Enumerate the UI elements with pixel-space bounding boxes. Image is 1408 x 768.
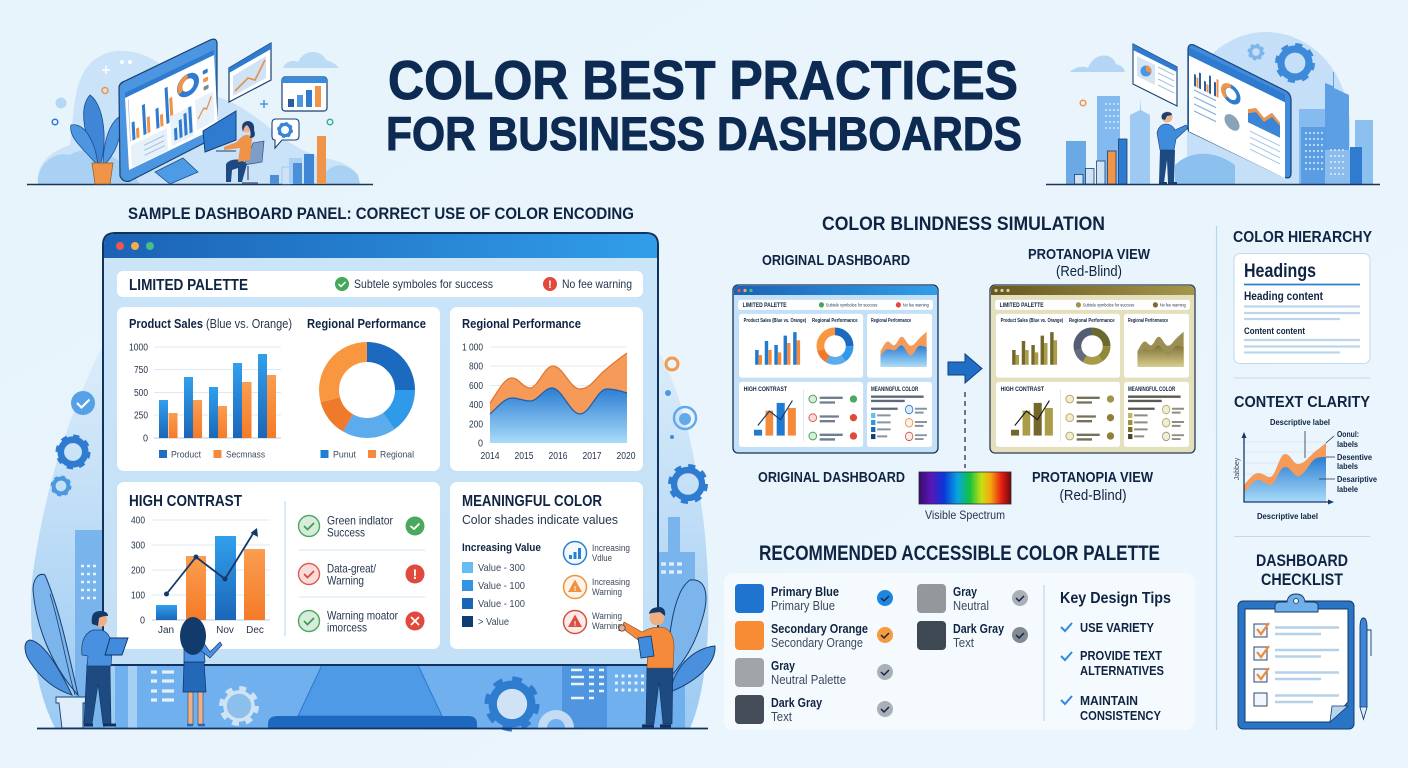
combo chart: Nov bbox=[216, 625, 234, 636]
icon: tablet display bbox=[203, 111, 236, 152]
icon: increasing value: Increasing bbox=[592, 543, 630, 553]
icon: warning: Warning bbox=[592, 611, 622, 621]
status: monitor: Warning moator bbox=[327, 608, 398, 622]
icon: increasing warning: ! bbox=[574, 586, 576, 593]
mini dashboard: protanopia: MEANINGFUL COLOR bbox=[1128, 387, 1176, 393]
card: product sales and regional performance: Product Sales bbox=[129, 317, 203, 331]
icon: check badge left bbox=[71, 391, 95, 415]
icon: gear pale bbox=[222, 689, 256, 723]
card: regional performance area chart: 0 bbox=[478, 438, 483, 450]
donut chart: regional performance bbox=[320, 352, 414, 460]
swatch: dark gray: Text bbox=[771, 710, 792, 724]
panel: sample dashboard bbox=[103, 233, 658, 665]
status: green indicator: Green indlator bbox=[327, 514, 393, 528]
card: regional performance area chart: 200 bbox=[469, 420, 483, 430]
icon: woman pointing bbox=[180, 617, 222, 725]
card: regional performance area chart: 2014 bbox=[480, 451, 500, 462]
banner: limited palette: No fee warning bbox=[562, 277, 632, 291]
bar chart: product sales: 1000 bbox=[129, 342, 148, 354]
dashed connector bbox=[964, 392, 966, 468]
swatch: gray neutral bbox=[917, 584, 1028, 613]
card: high contrast bbox=[117, 482, 440, 649]
swatch: gray: Gray bbox=[771, 659, 795, 673]
mini dashboard: original: Regional Performance bbox=[871, 318, 911, 324]
donut chart: regional performance: Regional bbox=[380, 450, 414, 460]
combo chart: 400 bbox=[131, 516, 145, 526]
icon: warning: ! bbox=[574, 621, 576, 628]
title: FOR BUSINESS DASHBOARDS bbox=[386, 107, 1022, 160]
banner: limited palette bbox=[117, 271, 643, 297]
label: original dashboard top: ORIGINAL DASHBOARD bbox=[762, 252, 910, 269]
card: color hierarchy: Headings bbox=[1244, 261, 1316, 282]
combo chart: Dec bbox=[246, 625, 264, 636]
label: protanopia view top bbox=[1028, 246, 1151, 280]
card: regional performance area chart: Regional Performance bbox=[462, 317, 581, 331]
card: product sales and regional performance bbox=[117, 307, 440, 471]
banner: limited palette: Subtele symboles for success bbox=[354, 277, 493, 291]
chart: context clarity: Desentive bbox=[1337, 453, 1373, 462]
mini dashboard: original: Regional Performance bbox=[812, 318, 858, 324]
mini dashboard: original: LIMITED PALETTE bbox=[743, 303, 787, 309]
status: warning: ! bbox=[413, 566, 417, 582]
swatch: secondary orange: Secondary Orange bbox=[771, 636, 863, 650]
mini dashboard: original: Product Sales (Blue vs. Orange) bbox=[744, 318, 806, 324]
mini dashboard: protanopia: Subtele symboles for success bbox=[1083, 302, 1135, 307]
chart: context clarity: labele bbox=[1337, 485, 1359, 494]
icon: clipboard checklist bbox=[1238, 594, 1354, 729]
swatch: gray: Neutral Palette bbox=[771, 673, 846, 687]
icon: floating bar chart window bbox=[282, 77, 327, 111]
chart: context clarity bbox=[1234, 417, 1378, 521]
card: regional performance area chart: 2016 bbox=[548, 451, 568, 462]
panel: accessible color palette bbox=[724, 573, 1195, 730]
illustration: scene behind dashboard bbox=[31, 345, 708, 728]
card: regional performance area chart: 600 bbox=[469, 381, 483, 392]
mini dashboard: original: HIGH CONTRAST bbox=[744, 386, 787, 393]
status: green indicator: Success bbox=[327, 526, 365, 540]
key design tips: Key Design Tips bbox=[1060, 590, 1171, 607]
title: COLOR BEST PRACTICES bbox=[388, 49, 1018, 111]
heading: dashboard checklist: CHECKLIST bbox=[1261, 571, 1343, 589]
label: original dashboard bottom: ORIGINAL DASHBOARD bbox=[758, 469, 905, 486]
legend: value shades: Value - 100 bbox=[478, 598, 525, 610]
icon: seated analyst bbox=[216, 121, 264, 183]
card: color hierarchy: Content content bbox=[1244, 326, 1306, 337]
status: monitor bbox=[298, 608, 424, 634]
spectrum bar: Visible Spectrum bbox=[925, 508, 1005, 522]
bar chart: product sales: 250 bbox=[134, 410, 148, 422]
mini dashboard: original: No fee warning bbox=[903, 302, 929, 307]
chart: context clarity: labels bbox=[1337, 462, 1359, 471]
status: monitor: imorcess bbox=[327, 620, 367, 634]
card: meaningful color bbox=[450, 482, 643, 649]
heading: color hierarchy: COLOR HIERARCHY bbox=[1233, 229, 1373, 246]
banner: limited palette: ! bbox=[548, 279, 552, 291]
heading: recommended palette: RECOMMENDED ACCESSIBLE COLOR PALETTE bbox=[759, 542, 1160, 565]
label: protanopia view bottom: PROTANOPIA VIEW bbox=[1032, 469, 1154, 486]
label: protanopia view bottom: (Red-Blind) bbox=[1060, 487, 1127, 504]
swatch: primary blue bbox=[735, 584, 893, 613]
mini dashboard: original bbox=[733, 285, 938, 453]
icon: settings speech bubble bbox=[272, 119, 299, 148]
icon: gear left lower bbox=[52, 477, 70, 495]
swatch: primary blue: Primary Blue bbox=[771, 585, 839, 599]
status: warning: Warning bbox=[327, 574, 364, 588]
chart: context clarity: Descriptive label bbox=[1270, 417, 1330, 427]
swatch: gray neutral: Neutral bbox=[953, 599, 989, 613]
icon: gear dark bbox=[489, 681, 535, 727]
label: protanopia view top: PROTANOPIA VIEW bbox=[1028, 246, 1151, 263]
status: warning: Data-great/ bbox=[327, 562, 377, 576]
combo chart: 100 bbox=[131, 590, 145, 602]
icon: man in orange bbox=[619, 607, 674, 726]
bar chart: product sales: 500 bbox=[134, 388, 148, 399]
icon: pen bbox=[1360, 618, 1371, 719]
icon: floating report window bbox=[1133, 44, 1177, 106]
icon: gear half bbox=[538, 710, 574, 728]
icon: increasing value bbox=[564, 542, 630, 564]
combo chart: Jan bbox=[158, 625, 174, 636]
arrow: original to protanopia bbox=[948, 354, 982, 383]
label: protanopia view bottom bbox=[1032, 469, 1154, 504]
icon: increasing warning: Increasing bbox=[592, 577, 630, 587]
heading: sample dashboard panel: SAMPLE DASHBOARD PANEL: CORRECT USE OF COLOR ENCODING bbox=[128, 204, 634, 223]
mini dashboard: original: Subtele symboles for success bbox=[826, 302, 878, 307]
legend: value shades bbox=[462, 562, 525, 628]
heading: dashboard checklist bbox=[1256, 552, 1348, 589]
icon: city skyline bbox=[1066, 72, 1373, 184]
bars: decorative bar chart bbox=[270, 136, 326, 184]
card: meaningful color: Color shades indicate values bbox=[462, 512, 618, 527]
card: high contrast: HIGH CONTRAST bbox=[129, 493, 242, 510]
chart: context clarity: Jabbey bbox=[1234, 457, 1241, 480]
swatch: dark gray text: Text bbox=[953, 636, 974, 650]
heading: dashboard checklist: DASHBOARD bbox=[1256, 552, 1348, 570]
monitor stand bbox=[268, 665, 477, 728]
banner: limited palette: LIMITED PALETTE bbox=[129, 277, 248, 294]
icon: increasing warning bbox=[564, 576, 630, 598]
swatch: secondary orange bbox=[735, 621, 893, 650]
mini dashboard: protanopia: HIGH CONTRAST bbox=[1001, 386, 1044, 393]
mini dashboard: protanopia bbox=[990, 285, 1195, 453]
heading: context clarity: CONTEXT CLARITY bbox=[1234, 394, 1370, 411]
status: green indicator bbox=[298, 514, 424, 540]
illustration: foreground figures and ground bbox=[25, 574, 715, 728]
card: regional performance area chart: 2015 bbox=[514, 451, 534, 462]
card: product sales and regional performance: (Blue vs. Orange) bbox=[206, 317, 292, 331]
spectrum bar bbox=[919, 472, 1011, 522]
icon: left plant bbox=[25, 574, 86, 728]
swatch: dark gray bbox=[735, 695, 893, 724]
combo chart bbox=[131, 516, 270, 636]
card: regional performance area chart: 800 bbox=[469, 362, 483, 372]
icon: gear right bbox=[671, 467, 705, 501]
icon: increasing value: Vdlue bbox=[592, 553, 612, 563]
bars: decorative bar chart bbox=[1074, 139, 1127, 184]
icon: increasing warning: Warning bbox=[592, 587, 622, 597]
bar chart: product sales: Product bbox=[171, 450, 201, 460]
heading: color blindness simulation: COLOR BLINDNESS SIMULATION bbox=[822, 214, 1105, 235]
key design tips: ALTERNATIVES bbox=[1080, 664, 1164, 678]
swatch: gray neutral: Gray bbox=[953, 585, 977, 599]
swatch: dark gray: Dark Gray bbox=[771, 696, 822, 710]
mini dashboard: original: MEANINGFUL COLOR bbox=[871, 387, 919, 393]
icon: large gear bbox=[1278, 46, 1312, 80]
icon: orange ring bbox=[666, 358, 678, 370]
bar chart: product sales: 0 bbox=[143, 434, 148, 444]
icon: small gear bbox=[1249, 45, 1263, 59]
card: color hierarchy bbox=[1234, 254, 1370, 364]
swatch: secondary orange: Secondary Orange bbox=[771, 622, 868, 636]
key design tips bbox=[1060, 590, 1171, 723]
icon: gear left upper bbox=[58, 437, 88, 467]
card: regional performance area chart: 2017 bbox=[582, 451, 602, 462]
icon: man with laptop bbox=[82, 611, 128, 725]
icon: potted plant bbox=[71, 95, 120, 184]
card: color hierarchy: Heading content bbox=[1244, 291, 1323, 303]
mini dashboard: protanopia: Regional Performance bbox=[1069, 318, 1115, 324]
bar chart: product sales: Secmnass bbox=[226, 450, 265, 460]
card: regional performance area chart bbox=[450, 307, 643, 471]
key design tips: USE VARIETY bbox=[1080, 621, 1155, 635]
key design tips: MAINTAIN bbox=[1080, 694, 1138, 708]
swatch: primary blue: Primary Blue bbox=[771, 599, 835, 613]
icon: standing presenter bbox=[1157, 112, 1188, 183]
chart: context clarity: Oonul: bbox=[1337, 430, 1359, 439]
legend: value shades: Value - 100 bbox=[478, 580, 525, 592]
card: meaningful color: MEANINGFUL COLOR bbox=[462, 493, 602, 510]
card: regional performance area chart: 400 bbox=[469, 400, 483, 411]
chart: context clarity: Descriptive label bbox=[1257, 511, 1318, 521]
bar chart: product sales: 750 bbox=[134, 365, 148, 376]
icon: large monitor bbox=[119, 39, 218, 184]
card: product sales and regional performance: Regional Performance bbox=[307, 317, 426, 331]
icon: large dashboard screen bbox=[1188, 45, 1291, 178]
combo chart: 0 bbox=[140, 616, 145, 626]
donut chart: regional performance: Punut bbox=[333, 450, 356, 460]
swatch: gray bbox=[735, 658, 893, 687]
combo chart: 300 bbox=[131, 540, 145, 552]
mini dashboard: protanopia: No fee warning bbox=[1160, 302, 1186, 307]
chart: context clarity: labels bbox=[1337, 440, 1359, 449]
legend: value shades: Value - 300 bbox=[478, 562, 525, 574]
mini dashboard: protanopia: Product Sales (Blue vs. Orange) bbox=[1001, 318, 1063, 324]
card: regional performance area chart: 1 000 bbox=[462, 342, 483, 354]
key design tips: PROVIDE TEXT bbox=[1080, 649, 1162, 663]
key design tips: CONSISTENCY bbox=[1080, 709, 1162, 723]
icon: warning: Warning bbox=[592, 621, 622, 631]
swatch: dark gray text: Dark Gray bbox=[953, 622, 1004, 636]
card: meaningful color: Increasing Value bbox=[462, 542, 541, 554]
card: regional performance area chart: 2020 bbox=[616, 451, 636, 462]
label: protanopia view top: (Red-Blind) bbox=[1056, 263, 1122, 280]
title bbox=[386, 49, 1022, 160]
mini dashboard: protanopia: LIMITED PALETTE bbox=[1000, 303, 1044, 309]
bar chart: product sales bbox=[129, 342, 281, 460]
status: warning bbox=[298, 562, 424, 588]
illustration: analyst at monitor bbox=[27, 39, 373, 184]
icon: floating line chart window bbox=[229, 43, 271, 102]
icon: warning bbox=[564, 610, 622, 634]
icon: right plant bbox=[668, 580, 715, 692]
mini dashboard: protanopia: Regional Performance bbox=[1128, 318, 1168, 324]
swatch: dark gray text bbox=[917, 621, 1028, 650]
chart: context clarity: Desariptive bbox=[1337, 475, 1378, 484]
combo chart: 200 bbox=[131, 566, 145, 576]
icon: target marker bbox=[665, 390, 696, 439]
legend: value shades: > Value bbox=[478, 616, 509, 628]
illustration: presenter at large screen bbox=[1046, 32, 1380, 184]
